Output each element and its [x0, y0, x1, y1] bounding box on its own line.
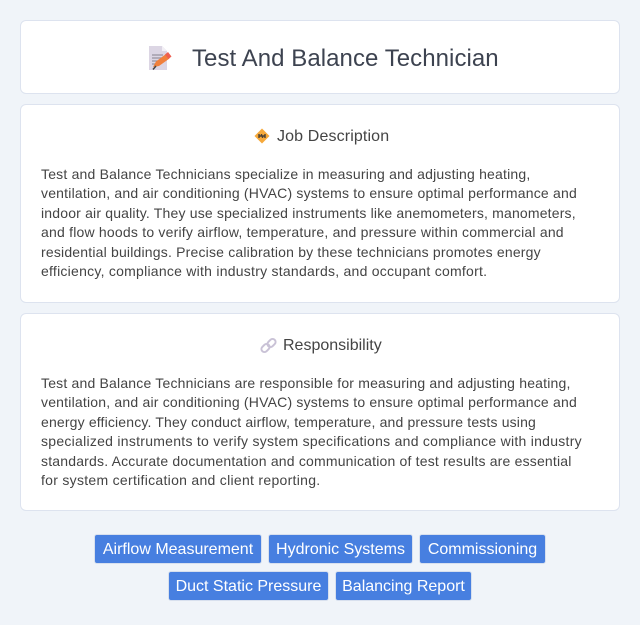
tag: Balancing Report	[335, 571, 472, 601]
text: responsibility: standards. Accurate documentation and communication of test results are essential	[41, 452, 572, 468]
text: job description: and flow hoods to verify airflow, temperature, and pressure within commercial and	[41, 224, 564, 240]
text: responsibility: Test and Balance Technicians are responsible for measuring and adjusting heating,	[41, 374, 571, 390]
text: job description: efficiency, compliance with industry standards, and occupant comfort.	[41, 263, 487, 279]
text: responsibility: specialized instruments to verify system specifications and compliance with industry	[41, 433, 582, 449]
tag: Airflow Measurement: Airflow Measurement	[103, 541, 253, 558]
tag: Commissioning	[419, 534, 546, 564]
title: Test And Balance Technician	[192, 45, 499, 72]
icon: document with pencil	[149, 46, 172, 70]
tag: Commissioning: Commissioning	[428, 541, 537, 558]
tag: Hydronic Systems	[268, 534, 413, 564]
icon: chain link	[260, 338, 276, 353]
text: job description: indoor air quality. They use specialized instruments like anemometers, manometers,	[41, 204, 576, 220]
tag: Duct Static Pressure: Duct Static Pressure	[176, 578, 321, 595]
text: responsibility: ventilation, and air conditioning (HVAC) systems to ensure optimal performance and	[41, 394, 577, 410]
tag: Balancing Report: Balancing Report	[342, 578, 465, 595]
text: job description: Test and Balance Technicians specialize in measuring and adjusting heating,	[41, 166, 530, 182]
panel: responsibility	[20, 313, 620, 511]
icon: construction diamond	[254, 128, 270, 144]
text: job description: ventilation, and air conditioning (HVAC) systems to ensure optimal performance and	[41, 185, 577, 201]
heading: responsibility: Responsibility	[283, 337, 382, 354]
heading: job description: Job Description	[277, 128, 389, 145]
text: responsibility: for system certification and client reporting.	[41, 472, 320, 488]
text: job description	[41, 166, 577, 279]
text: job description: residential buildings. Precise calibration by these technicians promotes energy	[41, 244, 541, 260]
panel: title card	[20, 20, 620, 94]
panel: job description	[20, 104, 620, 303]
tag: Hydronic Systems: Hydronic Systems	[276, 541, 405, 558]
text: responsibility: energy efficiency. They conduct airflow, temperature, and pressure tests using	[41, 414, 536, 430]
tag: Airflow Measurement	[94, 534, 262, 564]
tag: Duct Static Pressure	[168, 571, 329, 601]
text: responsibility	[41, 374, 582, 488]
